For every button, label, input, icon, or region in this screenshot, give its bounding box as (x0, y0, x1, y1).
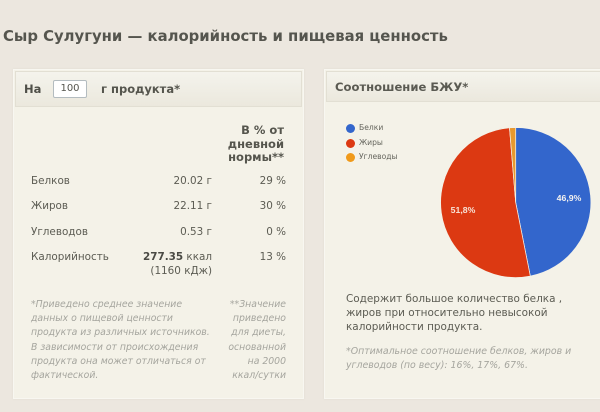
panel header: product amount (15, 71, 302, 107)
row value: 277.35 ккал (143, 251, 212, 263)
slice: proteins 46.9% (516, 127, 591, 276)
label: г продукта: г продукта* (101, 82, 180, 96)
footnote: daily diet: для диеты, (231, 327, 286, 338)
amount input: 100 (60, 83, 80, 94)
footnote: daily diet: приведено (233, 313, 286, 324)
row label: Жиров (31, 200, 68, 212)
legend (346, 123, 398, 162)
label: fats percent: 51,8% (451, 205, 476, 215)
panel header: ratio (326, 71, 600, 102)
panel: macronutrient ratio (324, 69, 600, 399)
legend item: carbohydrates (346, 152, 398, 162)
footnote: optimal ratio (346, 346, 571, 370)
footnote: daily diet (228, 299, 286, 381)
slice: carbohydrates (510, 128, 516, 202)
row value (143, 251, 212, 277)
row: fats (31, 200, 286, 212)
title: Сыр Сулугуни — калорийность и пищевая ценность (3, 27, 448, 45)
description text: жиров при относительно невысокой (346, 307, 548, 319)
column heading: daily percent: нормы** (228, 150, 284, 164)
footnote: average value: фактической. (31, 370, 98, 381)
label: На: На (24, 82, 41, 96)
panel heading: Соотношение БЖУ* (335, 80, 468, 94)
footnote: average value: продукта из различных источников. (31, 327, 210, 338)
footnote: average value (30, 299, 210, 381)
legend item: proteins: Белки (359, 123, 383, 132)
column heading: daily percent: дневной (228, 136, 284, 150)
row value: (1160 кДж) (150, 265, 212, 277)
row value: 20.02 г (173, 175, 212, 187)
panel: nutrition table (13, 69, 304, 399)
footnote: daily diet: на 2000 (248, 356, 286, 367)
footnote: average value: В зависимости от происхождения (31, 342, 198, 353)
row percent: 30 % (260, 200, 286, 212)
row label: Белков (31, 175, 70, 187)
footnote: daily diet: ккал/сутки (232, 370, 286, 381)
pie chart (440, 128, 591, 278)
row: proteins (31, 175, 286, 187)
column heading: daily percent: В % от (241, 123, 284, 137)
row: carbohydrates (31, 226, 286, 238)
legend item: carbohydrates: Углеводы (359, 152, 398, 161)
footnote: daily diet: **Значение (230, 299, 286, 310)
legend item: proteins (346, 123, 383, 133)
column heading: daily percent (228, 123, 284, 164)
amount input (53, 80, 87, 98)
row: calories (31, 251, 286, 277)
description text: Содержит большое количество белка , (346, 293, 562, 305)
footnote: optimal ratio: углеводов (по весу): 16%, 17%, 67%. (346, 360, 528, 370)
description text: калорийности продукта. (346, 321, 482, 333)
row percent: 29 % (260, 175, 286, 187)
row label: Углеводов (31, 226, 88, 238)
description text (346, 293, 562, 333)
footnote: daily diet: основанной (228, 342, 286, 353)
row percent: 13 % (260, 251, 286, 263)
row percent: 0 % (266, 226, 286, 238)
footnote: average value: продукта она может отличаться от (31, 356, 206, 367)
footnote: optimal ratio: *Оптимальное соотношение белков, жиров и (346, 346, 571, 356)
slice: fats 51.8% (441, 128, 530, 278)
row value: 22.11 г (173, 200, 212, 212)
footnote: average value: *Приведено среднее значение (31, 299, 182, 310)
footnote: average value: данных о пищевой ценности (31, 313, 173, 324)
label: proteins percent: 46,9% (557, 193, 582, 203)
row label: Калорийность (31, 251, 109, 263)
legend item: fats (346, 138, 383, 148)
row value: 0.53 г (180, 226, 212, 238)
legend item: fats: Жиры (359, 138, 383, 147)
